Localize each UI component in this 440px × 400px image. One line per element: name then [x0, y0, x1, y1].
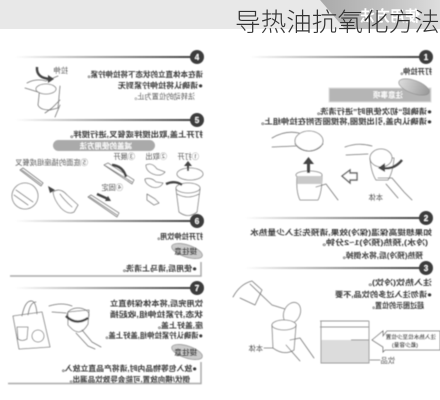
note tag: 提往意 [174, 347, 197, 357]
step 3: 注入热饮(冷饮)。 [363, 277, 432, 287]
illustration: pouring with ladle [233, 281, 314, 361]
step 5: 打开上盖,取出搅拌或餐叉,进行搅拌。 [65, 129, 203, 139]
illustration: lifting lid [272, 131, 338, 200]
step 7: 倒伏/横向放置,可能会导致饮品漏出。 [65, 374, 190, 384]
note tag: 提往意 [174, 246, 197, 256]
note banner [329, 75, 431, 102]
step 2: 预热(预冷)后,将水倒掉。 [338, 250, 423, 260]
title: 导热油抗氧化方法 [235, 2, 440, 39]
step 5: ①打开 [177, 152, 199, 161]
step 6: 6 [195, 217, 200, 226]
step 7: ●放入包等物品内时,请将产品直立放入。 [57, 363, 197, 373]
step 3: 3 [424, 264, 429, 273]
step 4: ●请确认将拉伸拧紧到无 [118, 80, 203, 90]
pill heading: 减盖的使用方法 [79, 140, 132, 150]
note tag [170, 240, 204, 262]
step 1: ●请确认内盖,引出搅圈,将搅圈否附在拉伸组上。 [256, 116, 432, 126]
step 5: 5 [195, 116, 200, 125]
callout: fill limit: (最少容量) [392, 341, 418, 349]
step 6: ●使用后,请马上清洗。 [118, 263, 197, 273]
step 4 [15, 50, 204, 117]
step 5: ③展开 [113, 152, 135, 161]
illustration: pouring with ladle: 本体 [249, 344, 263, 353]
illustration: twisting lid [345, 144, 412, 202]
illustration: tightening the cup [25, 67, 60, 117]
note tag [170, 341, 204, 363]
illustration: hand closing cup [49, 304, 101, 349]
step 4: 法转动的位置为止。 [130, 92, 195, 101]
step 5 [12, 113, 204, 217]
illustration: cup and lid [166, 161, 203, 216]
step 2 [245, 211, 433, 260]
step 3: 超过图示的位置。 [368, 300, 424, 310]
diagram: container fill level [320, 321, 395, 365]
illustration: combining the fork [12, 168, 78, 213]
step 4: 请在本体直立的状态下将拉伸拧紧。 [83, 69, 203, 79]
illustration: bag [13, 301, 50, 349]
note banner: 注意事项 [373, 90, 403, 100]
step 4: 4 [195, 53, 200, 62]
callout: fill limit: 注入热水位至少位置 [385, 333, 436, 341]
step 3: ●请勿注入过多的饮品,不要 [335, 289, 432, 299]
pill heading [53, 140, 155, 151]
step 4: 拉伸 [54, 66, 68, 75]
step 7: 座,盖好上盖。 [153, 320, 203, 330]
step 1 [250, 50, 433, 202]
step 5: ④固定 [101, 183, 123, 192]
step 7: 7 [195, 284, 200, 293]
step 1: 1 [424, 53, 429, 62]
illustration: fork unfolded [104, 163, 134, 184]
step 6: 打开拉伸饮用。 [153, 231, 203, 241]
step 2: 如果想提高保温(保冷)效果,请预先注入少量热水 [250, 227, 432, 237]
step 6 [10, 214, 204, 276]
illustration: twisting lid: 本体 [369, 193, 383, 202]
header band [0, 0, 440, 29]
callout: fill limit [372, 331, 440, 352]
step 7: 饮用完后,将本体保持直立 [110, 298, 203, 308]
header band: 使用方法 [360, 7, 420, 25]
step 7 [8, 281, 204, 384]
step 1: 打开拉伸。 [396, 66, 432, 76]
step 3 [233, 261, 440, 365]
step 5: ⑤底面的插座组成餐叉 [15, 158, 88, 167]
illustration: spoon parts [145, 164, 165, 205]
illustration: fork fixed [88, 194, 119, 217]
step 2: 2 [424, 214, 429, 223]
icon: hollow arrow [342, 170, 357, 183]
step 5: ②取出 [145, 152, 167, 161]
step 7: ●请确认拧紧拉伸组,盖好上盖。 [101, 330, 203, 340]
step 1: ●请确認“初次使用时”进行清洗。 [312, 106, 432, 116]
diagram: container fill level: 饮品 [381, 356, 395, 365]
step 2: (冷水),预热(预冷)1~2分钟。 [317, 237, 428, 247]
step 7: 状态,拧紧拉伸组,收起插 [110, 309, 203, 319]
